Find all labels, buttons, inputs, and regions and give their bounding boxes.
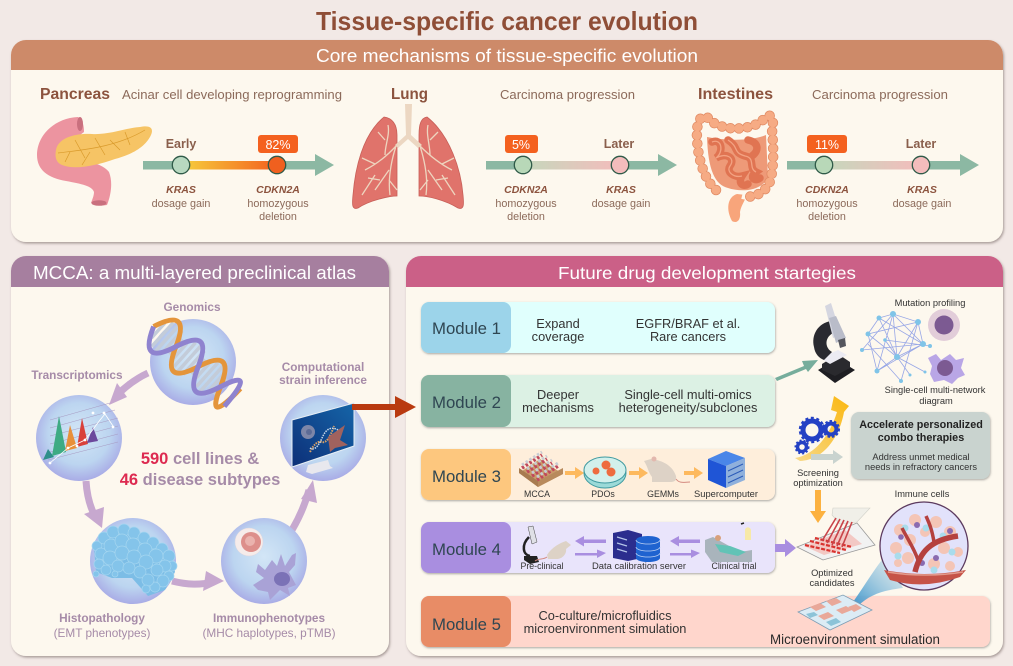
organ heading: intestines: Intestines [698, 86, 773, 103]
label: computational strain inference [279, 360, 367, 387]
module 2: mechanisms [522, 400, 594, 415]
arrow: module 2 to microscope [775, 360, 818, 381]
timeline arrow: lung: 5% [512, 138, 530, 152]
timeline arrow: lung: KRAS [606, 184, 636, 196]
label: screening optimization [793, 468, 843, 488]
subheading: lung: Carcinoma progression [500, 87, 635, 102]
label: optimized candidates: Optimized [811, 568, 853, 578]
icon: microfluidic chip [798, 595, 872, 630]
label: screening optimization: Screening [797, 468, 839, 478]
label: optimized candidates [810, 568, 855, 588]
icon: screening gears and arrow [795, 396, 849, 461]
panel: MCCA atlas [11, 256, 389, 656]
node: transcriptomics [36, 395, 122, 481]
timeline arrow: intestines: homozygous [796, 198, 858, 210]
timeline arrow: pancreas: KRAS [166, 184, 196, 196]
labels: module 3 stages: Supercomputer [694, 489, 758, 499]
panel header: MCCA [11, 256, 389, 287]
arrow [565, 467, 584, 479]
label: computational strain inference: strain inference [279, 373, 367, 387]
timeline arrow: lung: homozygous [495, 198, 557, 210]
icon: clinical trial bed [705, 523, 752, 562]
callout: accelerate therapies [851, 412, 990, 479]
central stat: 46 disease subtypes [120, 471, 280, 489]
label: network diagram: diagram [919, 396, 953, 406]
icon: microscope and mouse [524, 526, 571, 564]
icon: MCCA plate [519, 452, 563, 487]
labels: module 4 stages: Pre-clinical [520, 561, 564, 571]
icon: intestines [697, 116, 773, 222]
title: Tissue-specific cancer evolution [316, 6, 698, 36]
timeline arrow: intestines: CDKN2A [805, 184, 849, 196]
node: computational strain inference [280, 395, 366, 481]
callout: accelerate therapies: needs in refractory cancers [865, 462, 977, 472]
heading: future drug development: Future drug development startegies [558, 263, 856, 283]
organ heading: lung: Lung [391, 86, 428, 103]
heading: core mechanisms: Core mechanisms of tissue-specific evolution [316, 45, 698, 66]
panel header: core mechanisms [11, 40, 1003, 70]
panel: drug development strategies [406, 256, 1003, 656]
timeline arrow: pancreas: 82% [265, 138, 291, 152]
labels: module 3 stages: GEMMs [647, 489, 679, 499]
module 3 [421, 449, 775, 500]
module 5: Co-culture/microfluidics [539, 608, 671, 623]
label: immunophenotypes: Immunophenotypes [213, 611, 325, 625]
timeline arrow: intestines: dosage gain [893, 198, 951, 210]
module 4 [421, 522, 775, 573]
icon: GEMM mouse [644, 456, 690, 482]
cycle arrows [86, 373, 309, 584]
label: genomics: Genomics [163, 300, 221, 314]
central stat: 590 cell lines & [141, 450, 259, 468]
icon: lung [353, 104, 463, 208]
label: network diagram [885, 385, 986, 406]
label: histopathology: (EMT phenotypes) [54, 626, 150, 640]
module 1: Expand [536, 316, 580, 331]
module 2: Single-cell multi-omics [624, 387, 752, 402]
timeline arrow: intestines [787, 135, 979, 223]
arrow: orange down [810, 490, 826, 523]
module 3: Module 3 [432, 467, 501, 486]
timeline arrow: lung: dosage gain [592, 198, 650, 210]
module 1 [421, 302, 775, 353]
connector arrow: atlas to modules [352, 396, 416, 418]
double arrows [670, 536, 700, 558]
icon: PDOs dish [584, 457, 626, 488]
icon: multichannel pipette and plate [797, 508, 875, 560]
timeline arrow: intestines: KRAS [907, 184, 937, 196]
module 4: Module 4 [432, 540, 501, 559]
label: screening optimization: optimization [793, 478, 843, 488]
timeline arrow: pancreas [143, 135, 334, 223]
timeline arrow: pancreas: Early [166, 137, 196, 151]
arrow [684, 467, 703, 479]
arrow: gray to therapies [811, 450, 843, 464]
module 5 [421, 596, 990, 647]
subheading: intestines: Carcinoma progression [812, 87, 948, 102]
heading: MCCA: MCCA: a multi-layered preclinical atlas [33, 262, 356, 283]
labels: module 4 stages [520, 561, 757, 571]
labels: module 4 stages: Data calibration server [592, 561, 686, 571]
label: immune cells: Immune cells [895, 489, 950, 499]
label: network diagram: Single-cell multi-network [885, 385, 986, 395]
label: histopathology [54, 611, 150, 640]
module 5: Module 5 [432, 615, 501, 634]
node: immunophenotypes [221, 518, 307, 604]
timeline arrow: pancreas: homozygous [247, 198, 309, 210]
node: genomics [140, 312, 246, 412]
label: mutation profiling: Mutation profiling [895, 298, 965, 308]
module 1: Module 1 [432, 319, 501, 338]
subheading: pancreas: Acinar cell developing reprogramming [122, 87, 342, 102]
organ heading: pancreas: Pancreas [40, 86, 110, 103]
label: histopathology: Histopathology [59, 611, 145, 625]
module 5: Microenvironment simulation [770, 632, 940, 647]
label: transcriptomics: Transcriptomics [31, 368, 123, 382]
label: optimized candidates: candidates [810, 578, 855, 588]
timeline arrow: lung [486, 135, 677, 223]
double arrows [575, 536, 606, 558]
arrowheads [84, 383, 317, 591]
module 1: coverage [532, 329, 584, 344]
icon: pancreas [37, 117, 152, 206]
zoom cone [853, 556, 903, 606]
timeline arrow: pancreas: deletion [259, 211, 297, 223]
timeline arrow: intestines: Later [906, 137, 936, 151]
timeline arrow: intestines: 11% [815, 138, 839, 152]
label: immunophenotypes: (MHC haplotypes, pTMB) [202, 626, 336, 640]
label: immunophenotypes [202, 611, 336, 640]
module 1: EGFR/BRAF et al. [636, 316, 740, 331]
module 5: microenvironment simulation [524, 621, 686, 636]
timeline arrow: pancreas: dosage gain [152, 198, 210, 210]
icon: dendritic cell [928, 354, 965, 384]
arrow: module 4 to plate [775, 539, 796, 557]
timeline arrow: intestines: deletion [808, 211, 846, 223]
labels: module 3 stages: MCCA [524, 489, 550, 499]
network diagram [860, 311, 932, 383]
icon: microscope [813, 303, 855, 383]
timeline arrow: lung: Later [604, 137, 634, 151]
callout: accelerate therapies: Address unmet medical [872, 452, 970, 462]
icon: supercomputer [708, 451, 745, 488]
central stat [120, 450, 280, 489]
icon: cell [928, 309, 960, 341]
label: computational strain inference: Computational [282, 360, 364, 374]
module 1: Rare cancers [650, 329, 726, 344]
icon: tumor microenvironment [880, 502, 968, 590]
callout: accelerate therapies: combo therapies [878, 432, 964, 444]
timeline arrow: lung: deletion [507, 211, 545, 223]
labels: module 3 stages [524, 489, 758, 499]
module 2 [421, 375, 775, 427]
node: histopathology [90, 518, 177, 604]
panel header: future drug development [406, 256, 1003, 287]
icon: data calibration server [613, 530, 660, 562]
module 2: Deeper [537, 387, 580, 402]
module 2: Module 2 [432, 393, 501, 412]
labels: module 3 stages: PDOs [591, 489, 615, 499]
arrow [629, 467, 648, 479]
labels: module 4 stages: Clinical trial [712, 561, 757, 571]
callout: accelerate therapies: Accelerate personalized [859, 419, 983, 431]
timeline arrow: pancreas: CDKN2A [256, 184, 300, 196]
panel: core mechanisms [11, 40, 1003, 242]
module 2: heterogeneity/subclones [619, 400, 757, 415]
timeline arrow: lung: CDKN2A [504, 184, 548, 196]
